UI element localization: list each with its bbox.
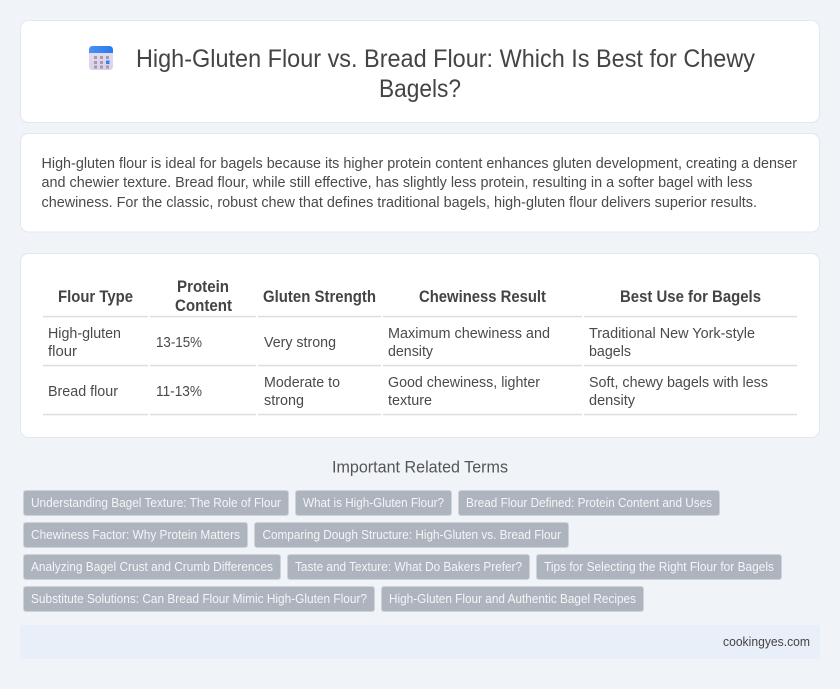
table row: bread flour [48, 375, 768, 409]
icon: calendar [89, 46, 113, 70]
table row: bread flour: 11-13% [156, 384, 202, 400]
table header: Protein [177, 278, 229, 296]
panel: introduction [20, 134, 820, 232]
footer: cookingyes.com [723, 634, 810, 649]
title: High-Gluten Flour vs. Bread Flour: Which Is Best for Chewy [136, 45, 755, 73]
table row: bread flour: strong [264, 393, 304, 409]
text block: introduction: and chewier texture. Bread flour, while still effective, has slightly less protein, resulting in a softer bagel with less [42, 175, 752, 191]
tag list: related terms: Tips for Selecting the Right Flour for Bagels [544, 559, 774, 574]
text block: introduction: chewiness. For the classic, robust chew that defines traditional bagels, high-gluten flour delivers superior results. [42, 195, 757, 211]
table header: Gluten Strength [263, 288, 376, 306]
text block: introduction [42, 156, 797, 211]
table row: high-gluten flour: density [388, 344, 434, 360]
tag list: related terms: Understanding Bagel Texture: The Role of Flour [31, 495, 282, 510]
footer [20, 625, 820, 659]
tag list: related terms: Analyzing Bagel Crust and Crumb Differences [31, 559, 273, 574]
tag list: related terms: High-Gluten Flour and Authentic Bagel Recipes [389, 591, 636, 606]
table row: high-gluten flour: Traditional New York-style [589, 326, 755, 342]
table row: high-gluten flour: Very strong [264, 335, 336, 351]
tag list: related terms: Taste and Texture: What Do Bakers Prefer? [295, 559, 522, 574]
heading: related terms: Important Related Terms [332, 458, 508, 476]
title [136, 45, 755, 103]
table row: bread flour: Soft, chewy bagels with less [589, 375, 768, 391]
table row: bread flour: Good chewiness, lighter [388, 375, 540, 391]
table row: high-gluten flour: High-gluten [48, 326, 121, 342]
table row: high-gluten flour: bagels [589, 344, 631, 360]
table row: high-gluten flour: Maximum chewiness and [388, 326, 550, 342]
panel: comparison table [20, 254, 820, 438]
tag list: related terms [24, 490, 782, 612]
title: Bagels? [379, 75, 461, 103]
tag list: related terms: Chewiness Factor: Why Protein Matters [31, 527, 240, 542]
table row: bread flour: texture [388, 393, 432, 409]
tag list: related terms: What is High-Gluten Flour? [303, 495, 444, 510]
table row: bread flour: Bread flour [48, 384, 118, 400]
table row: high-gluten flour: flour [48, 344, 77, 360]
table header: Chewiness Result [419, 288, 546, 306]
tag list: related terms: Comparing Dough Structure: High-Gluten vs. Bread Flour [262, 527, 562, 542]
table row: bread flour: Moderate to [264, 375, 340, 391]
table row: high-gluten flour: 13-15% [156, 335, 202, 351]
table header: Content [175, 297, 232, 315]
table header [58, 278, 761, 315]
tag list: related terms: Substitute Solutions: Can Bread Flour Mimic High-Gluten Flour? [31, 591, 367, 606]
table header: Best Use for Bagels [620, 288, 761, 306]
table row: high-gluten flour [48, 326, 755, 360]
panel: header [20, 20, 820, 122]
text block: introduction: High-gluten flour is ideal for bagels because its higher protein content enhances gluten development, creating a denser [42, 156, 797, 172]
table row: bread flour: density [589, 393, 636, 409]
table header: Flour Type [58, 288, 133, 306]
tag list: related terms: Bread Flour Defined: Protein Content and Uses [466, 495, 712, 510]
